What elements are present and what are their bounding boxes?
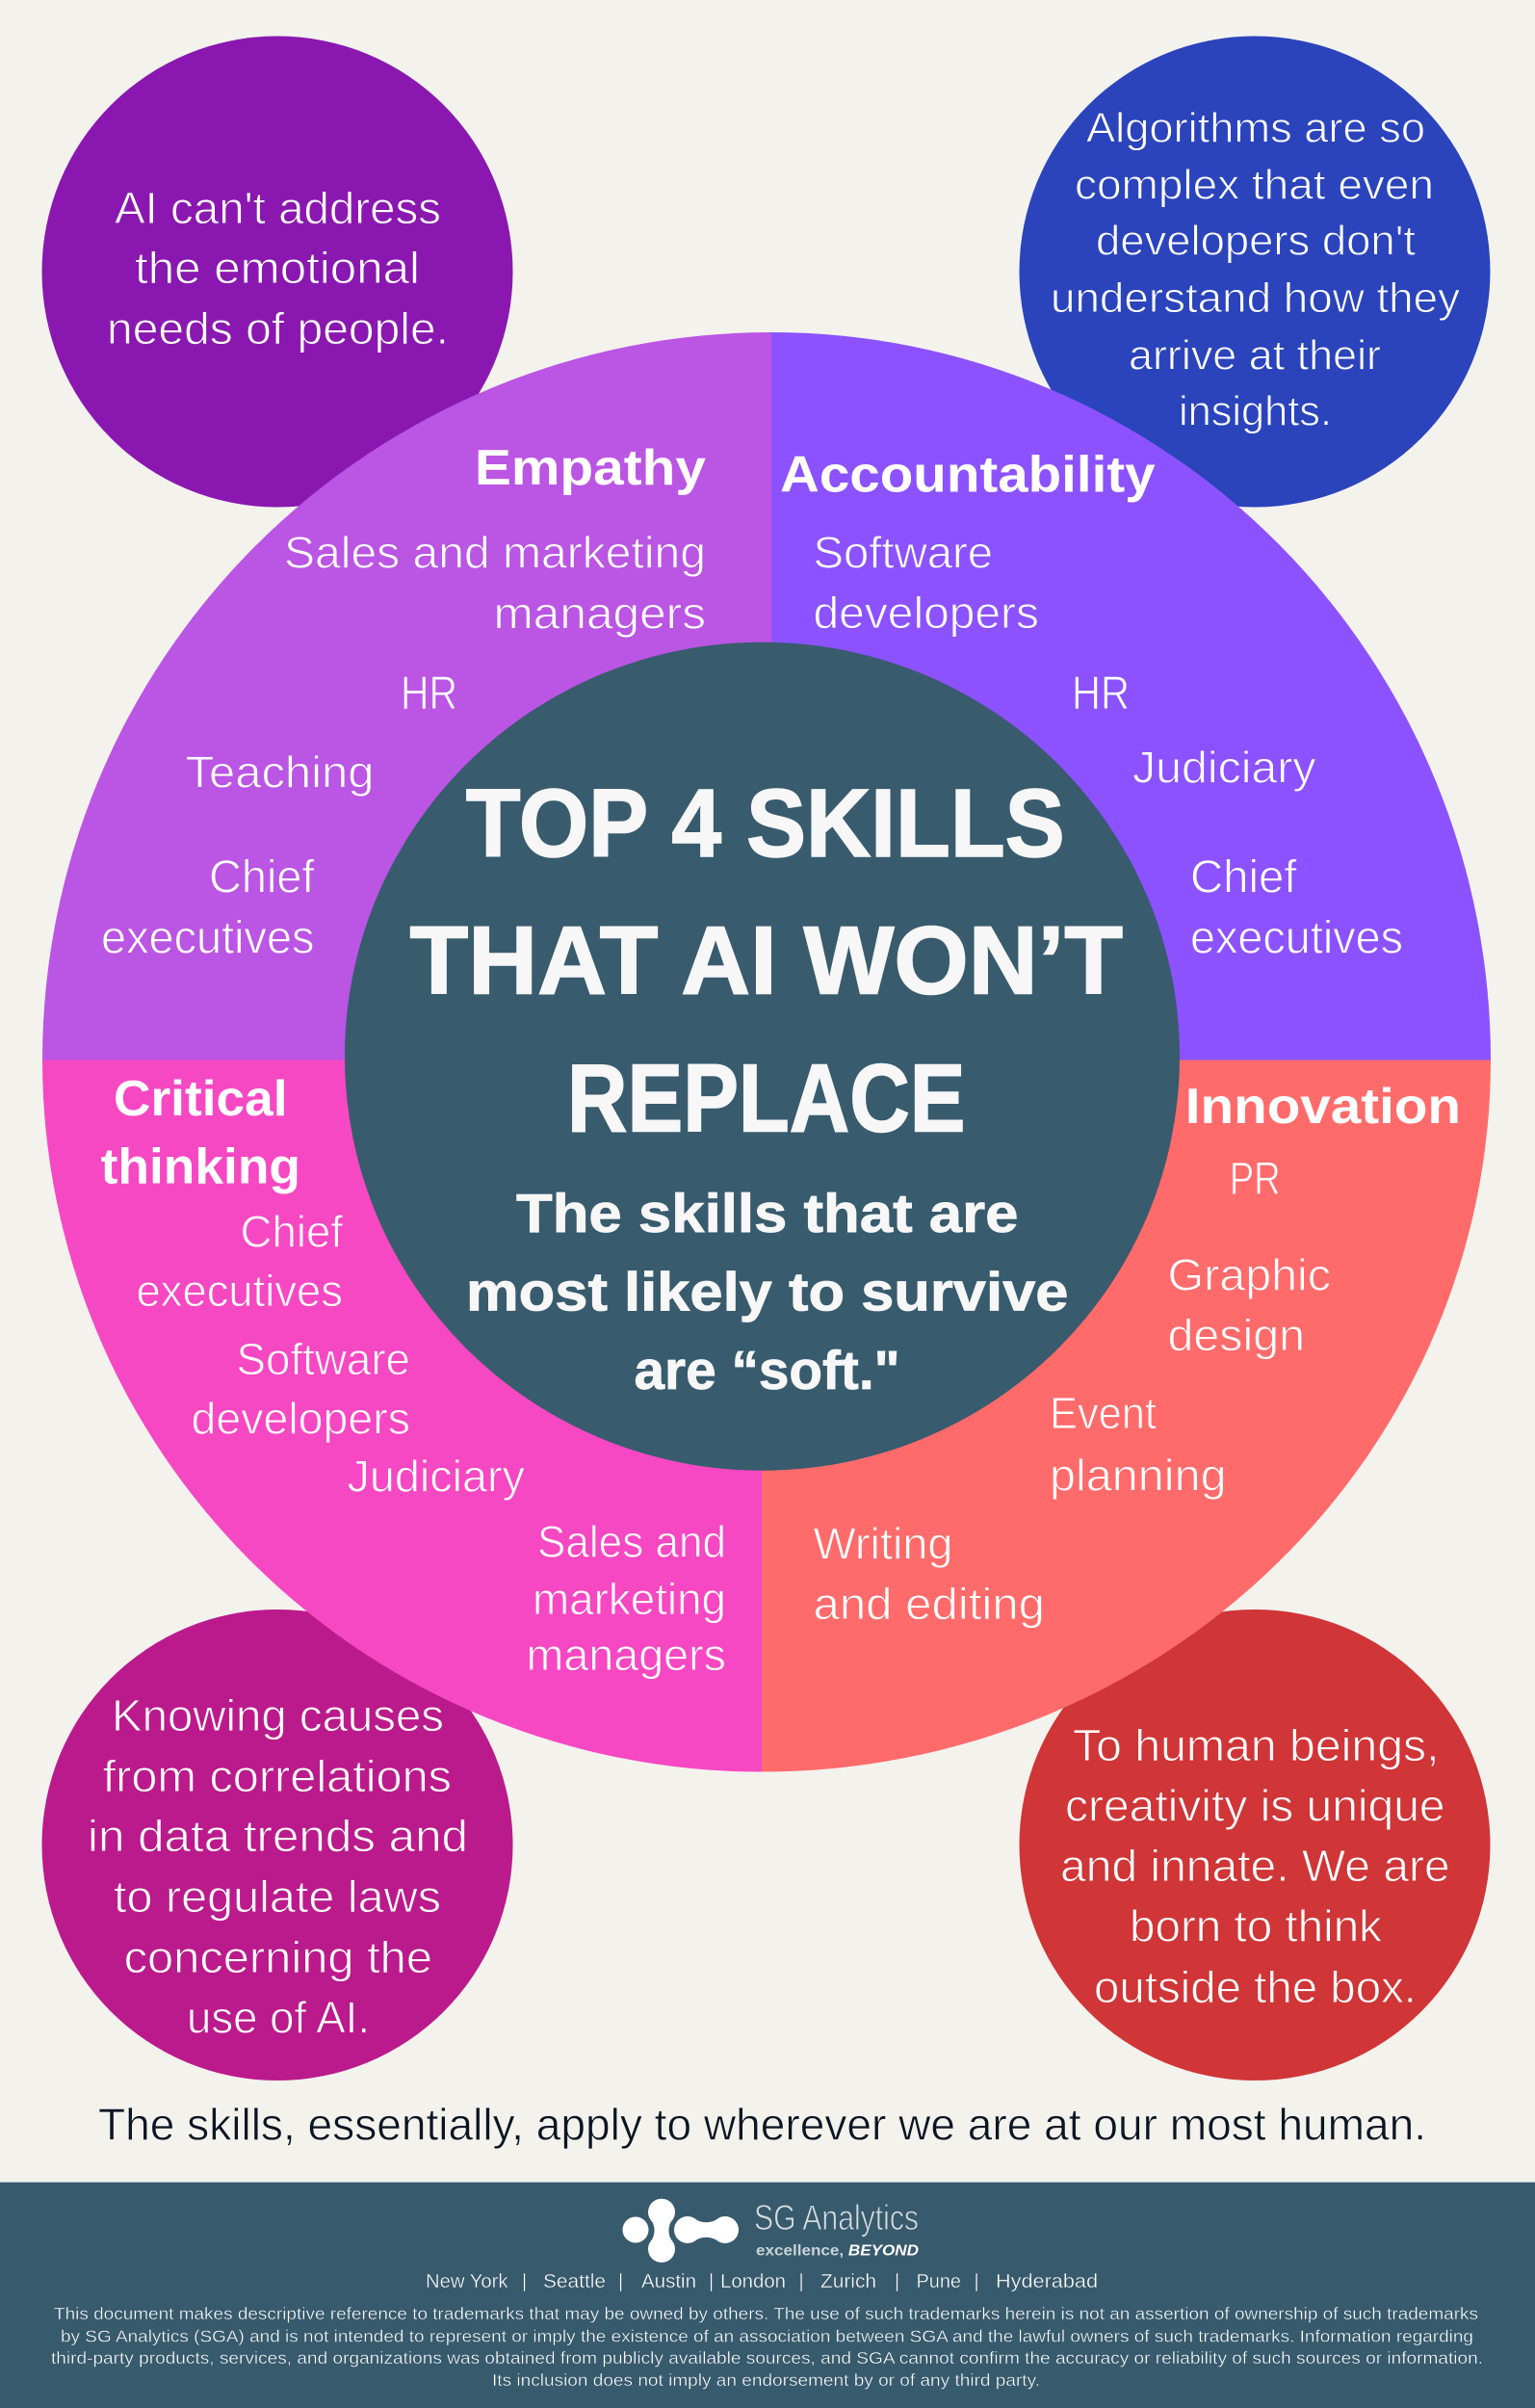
pie panel: accountability: [771, 332, 1491, 1060]
office locations: |: [799, 2271, 804, 2292]
callout circle: innovation: born to think: [1130, 1901, 1383, 1951]
pie panel: innovation: Writing: [813, 1518, 953, 1568]
title: [410, 770, 1123, 1152]
pie panel: innovation: planning: [1050, 1451, 1227, 1501]
office locations: New York: [426, 2271, 509, 2292]
office locations: Hyderabad: [996, 2271, 1098, 2292]
callout circle: innovation: outside the box.: [1094, 1962, 1417, 2012]
callout circle: critical thinking: in data trends and: [88, 1811, 468, 1861]
pie panel: critical thinking: executives: [137, 1266, 343, 1316]
office locations: [426, 2271, 1098, 2292]
callout circle: critical thinking: [42, 1610, 512, 2081]
pie panel: empathy: Teaching: [185, 747, 374, 798]
callout circle: innovation: To human beings,: [1073, 1720, 1439, 1770]
pie panel: accountability: Software: [813, 528, 993, 578]
heading: accountability: Accountability: [780, 447, 1156, 503]
callout circle: empathy: the emotional: [135, 243, 420, 293]
logo wordmark: [754, 2198, 919, 2260]
callout circle: critical thinking: use of AI.: [187, 1993, 370, 2043]
subtitle: are “soft.": [634, 1340, 899, 1401]
office locations: Seattle: [543, 2271, 606, 2292]
callout circle: empathy: AI can't address: [115, 183, 441, 233]
pie panel: accountability: Judiciary: [1132, 742, 1315, 792]
pie panel: accountability: Chief: [1190, 851, 1297, 903]
heading: critical thinking: Critical: [114, 1071, 287, 1127]
title: THAT AI WON’T: [410, 907, 1123, 1015]
pie panel: innovation: [762, 1060, 1491, 1772]
pie panel: critical thinking: Judiciary: [347, 1451, 525, 1501]
callout circle: accountability: complex that even: [1075, 162, 1434, 208]
closing statement: The skills, essentially, apply to wherever we are at our most human.: [98, 2100, 1426, 2150]
pie panel: empathy: managers: [493, 588, 706, 638]
pie panel: critical thinking: marketing: [533, 1574, 726, 1624]
callout circle: critical thinking: to regulate laws: [114, 1871, 441, 1922]
office locations: |: [618, 2271, 623, 2292]
heading: critical thinking: [101, 1071, 300, 1194]
disclaimer: by SG Analytics (SGA) and is not intended to represent or imply the existence of an association between SGA and the lawful owners of such trademarks. Information regarding: [61, 2327, 1473, 2346]
office locations: |: [522, 2271, 527, 2292]
pie panel: critical thinking: [42, 1060, 762, 1772]
pie panel: accountability: executives: [1190, 913, 1403, 963]
callout circle: empathy: needs of people.: [107, 303, 449, 353]
callout circle: accountability: Algorithms are so: [1086, 104, 1425, 152]
center circle: [345, 642, 1180, 1471]
office locations: |: [709, 2271, 714, 2292]
subtitle: The skills that are: [516, 1183, 1019, 1244]
callout circle: critical thinking: from correlations: [103, 1751, 452, 1801]
office locations: London: [720, 2271, 786, 2292]
footer panel: [0, 2182, 1535, 2408]
pie panel: empathy: [42, 332, 771, 1060]
icon: SG Analytics logo: [622, 2199, 739, 2263]
pie panel: critical thinking: Software: [237, 1334, 410, 1384]
callout circle: critical thinking: concerning the: [124, 1932, 432, 1982]
logo wordmark: excellence, BEYOND: [756, 2243, 919, 2260]
callout circle: accountability: [1019, 37, 1491, 507]
pie panel: innovation: PR: [1230, 1154, 1281, 1205]
callout circle: innovation: [1019, 1610, 1491, 2081]
office locations: Zurich: [820, 2271, 876, 2292]
disclaimer: This document makes descriptive reference to trademarks that may be owned by others. The use of such trademarks herein is not an assertion of ownership of such trademarks: [54, 2304, 1478, 2323]
pie panel: critical thinking: Chief: [241, 1206, 343, 1256]
callout circle: innovation: creativity is unique: [1065, 1780, 1445, 1830]
callout circle: accountability: developers don't: [1096, 218, 1416, 264]
callout circle: empathy: [42, 37, 512, 507]
subtitle: [466, 1183, 1069, 1401]
office locations: Pune: [917, 2271, 961, 2292]
pie panel: accountability: developers: [813, 588, 1039, 638]
callout circle: accountability: understand how they: [1051, 275, 1460, 322]
pie panel: innovation: Event: [1050, 1388, 1157, 1438]
disclaimer: third-party products, services, and organizations was obtained from publicly available sources, and SGA cannot confirm the accuracy or reliability of such sources or information.: [51, 2348, 1483, 2368]
heading: empathy: Empathy: [475, 440, 706, 496]
pie panel: accountability: HR: [1072, 667, 1130, 720]
disclaimer: Its inclusion does not imply an endorsement by or of any third party.: [492, 2370, 1040, 2390]
office locations: |: [895, 2271, 899, 2292]
title: REPLACE: [567, 1044, 965, 1152]
disclaimer: [51, 2304, 1483, 2390]
pie panel: critical thinking: developers: [191, 1393, 410, 1443]
pie panel: empathy: executives: [101, 913, 314, 963]
callout circle: critical thinking: Knowing causes: [112, 1690, 444, 1741]
office locations: Austin: [641, 2271, 696, 2292]
callout circle: accountability: insights.: [1179, 387, 1332, 435]
pie panel: innovation: design: [1167, 1310, 1305, 1360]
logo wordmark: SG Analytics: [754, 2198, 919, 2238]
pie panel: innovation: Graphic: [1167, 1250, 1331, 1300]
office locations: |: [975, 2271, 979, 2292]
pie panel: critical thinking: Sales and: [537, 1516, 726, 1566]
subtitle: most likely to survive: [466, 1262, 1069, 1323]
pie panel: empathy: HR: [401, 667, 457, 720]
heading: innovation: Innovation: [1185, 1079, 1461, 1135]
pie panel: innovation: and editing: [813, 1579, 1045, 1629]
callout circle: innovation: and innate. We are: [1060, 1841, 1450, 1891]
pie panel: empathy: Chief: [209, 851, 315, 903]
pie panel: empathy: Sales and marketing: [284, 528, 706, 578]
title: TOP 4 SKILLS: [466, 770, 1065, 877]
callout circle: accountability: arrive at their: [1129, 331, 1381, 380]
pie panel: critical thinking: managers: [526, 1630, 726, 1680]
heading: critical thinking: thinking: [101, 1139, 300, 1194]
